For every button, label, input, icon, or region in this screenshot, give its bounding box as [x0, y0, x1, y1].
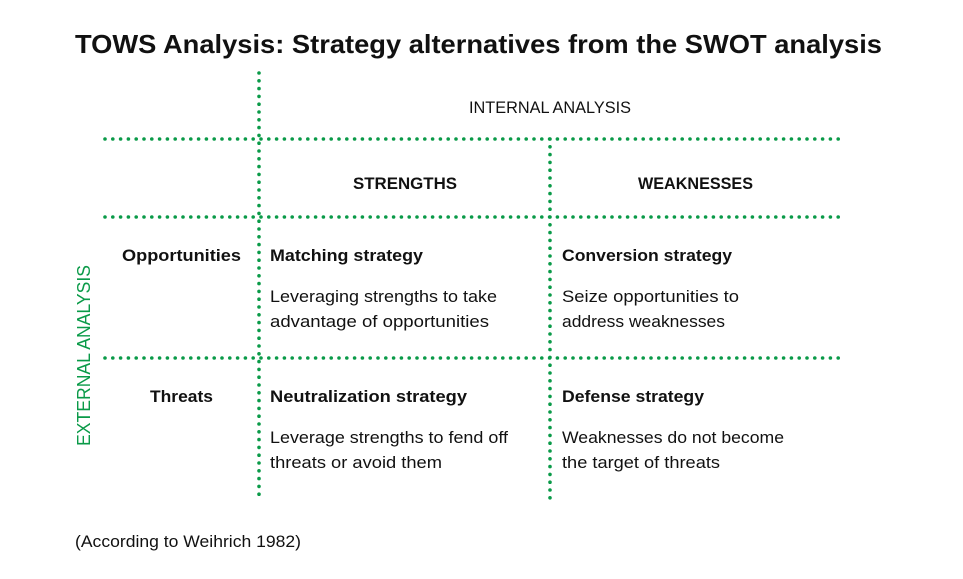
- cell: matching strategy: Leveraging strengths to take: [270, 287, 497, 306]
- heading: external analysis: EXTERNAL ANALYSIS: [74, 265, 94, 446]
- row label: threats: Threats: [150, 387, 213, 406]
- footer source: (According to Weihrich 1982): [75, 532, 301, 551]
- heading: strengths: STRENGTHS: [353, 174, 457, 193]
- cell: neutralization strategy: Neutralization strategy: [270, 387, 468, 406]
- title: TOWS Analysis: Strategy alternatives from the SWOT analysis: [75, 29, 882, 59]
- row label: opportunities: Opportunities: [122, 246, 241, 265]
- cell: conversion strategy: Seize opportunities to: [562, 287, 739, 306]
- cell: defense strategy: [562, 387, 784, 472]
- cell: matching strategy: advantage of opportunities: [270, 312, 489, 331]
- cell: matching strategy: [270, 246, 497, 331]
- cell: defense strategy: the target of threats: [562, 453, 720, 472]
- cell: defense strategy: Defense strategy: [562, 387, 705, 406]
- heading: internal analysis: INTERNAL ANALYSIS: [469, 98, 631, 117]
- cell: matching strategy: Matching strategy: [270, 246, 424, 265]
- cell: neutralization strategy: threats or avoid them: [270, 453, 442, 472]
- cell: conversion strategy: address weaknesses: [562, 312, 725, 331]
- cell: defense strategy: Weaknesses do not become: [562, 428, 784, 447]
- cell: conversion strategy: Conversion strategy: [562, 246, 733, 265]
- cell: neutralization strategy: Leverage strengths to fend off: [270, 428, 508, 447]
- cell: conversion strategy: [562, 246, 739, 331]
- heading: weaknesses: WEAKNESSES: [638, 174, 753, 193]
- cell: neutralization strategy: [270, 387, 508, 472]
